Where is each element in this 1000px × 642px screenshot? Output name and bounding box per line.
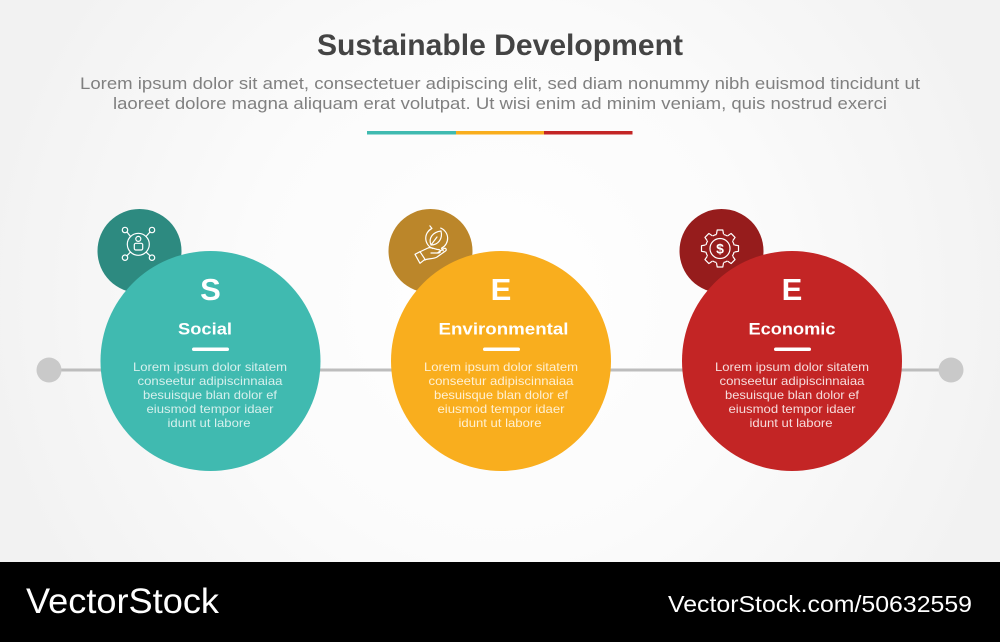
- body text: eiusmod tempor idaer: [438, 402, 564, 416]
- body text: eiusmod tempor idaer: [146, 402, 274, 416]
- body text: [133, 360, 287, 430]
- dollar sign: $: [716, 240, 724, 256]
- letter: S: [200, 272, 221, 307]
- body text: idunt ut labore: [168, 416, 251, 430]
- body text: conseetur adipiscinnaiaa: [138, 374, 283, 388]
- timeline connector with end dots: [36, 358, 964, 382]
- underline: [483, 348, 520, 351]
- body text: conseetur adipiscinnaiaa: [428, 374, 574, 388]
- panel: environmental: [388, 209, 611, 471]
- heading: Economic: [748, 320, 836, 338]
- subtitle text block: [80, 74, 920, 113]
- heading: Environmental: [438, 320, 568, 338]
- subtitle text block: laoreet dolore magna aliquam erat volutpat. Ut wisi enim ad minim veniam, quis nostrud exerci: [113, 94, 887, 113]
- underline: [774, 348, 811, 351]
- body text: besuisque blan dolor ef: [725, 388, 860, 402]
- tricolor title divider: [367, 131, 632, 134]
- body text: Lorem ipsum dolor sitatem: [715, 360, 869, 374]
- subtitle text block: Lorem ipsum dolor sit amet, consectetuer adipiscing elit, sed diam nonummy nibh euismod tincidunt ut: [80, 74, 920, 93]
- footer bar: [0, 562, 1000, 642]
- letter: E: [782, 272, 802, 307]
- letter: E: [491, 272, 511, 307]
- icon: gear with dollar: [680, 209, 764, 293]
- footer logo: VectorStock: [26, 582, 220, 621]
- body text: idunt ut labore: [750, 416, 833, 430]
- body text: besuisque blan dolor ef: [143, 388, 278, 402]
- body text: eiusmod tempor idaer: [728, 402, 856, 416]
- body text: idunt ut labore: [458, 416, 542, 430]
- underline: [192, 348, 229, 351]
- main circle: [391, 251, 611, 471]
- body text: conseetur adipiscinnaiaa: [720, 374, 865, 388]
- body text: Lorem ipsum dolor sitatem: [133, 360, 287, 374]
- body text: besuisque blan dolor ef: [434, 388, 569, 402]
- main circle: [682, 251, 902, 471]
- heading: Social: [178, 320, 232, 338]
- body text: Lorem ipsum dolor sitatem: [424, 360, 578, 374]
- footer url: VectorStock.com/50632559: [668, 591, 972, 617]
- body text: [424, 360, 578, 430]
- body text: [715, 360, 869, 430]
- panel: economic: [680, 209, 902, 471]
- title: Sustainable Development: [317, 29, 683, 62]
- icon: social network person: [98, 209, 182, 293]
- icon: hand holding leaf: [388, 209, 472, 293]
- panel: social: [98, 209, 320, 471]
- main circle: [100, 251, 320, 471]
